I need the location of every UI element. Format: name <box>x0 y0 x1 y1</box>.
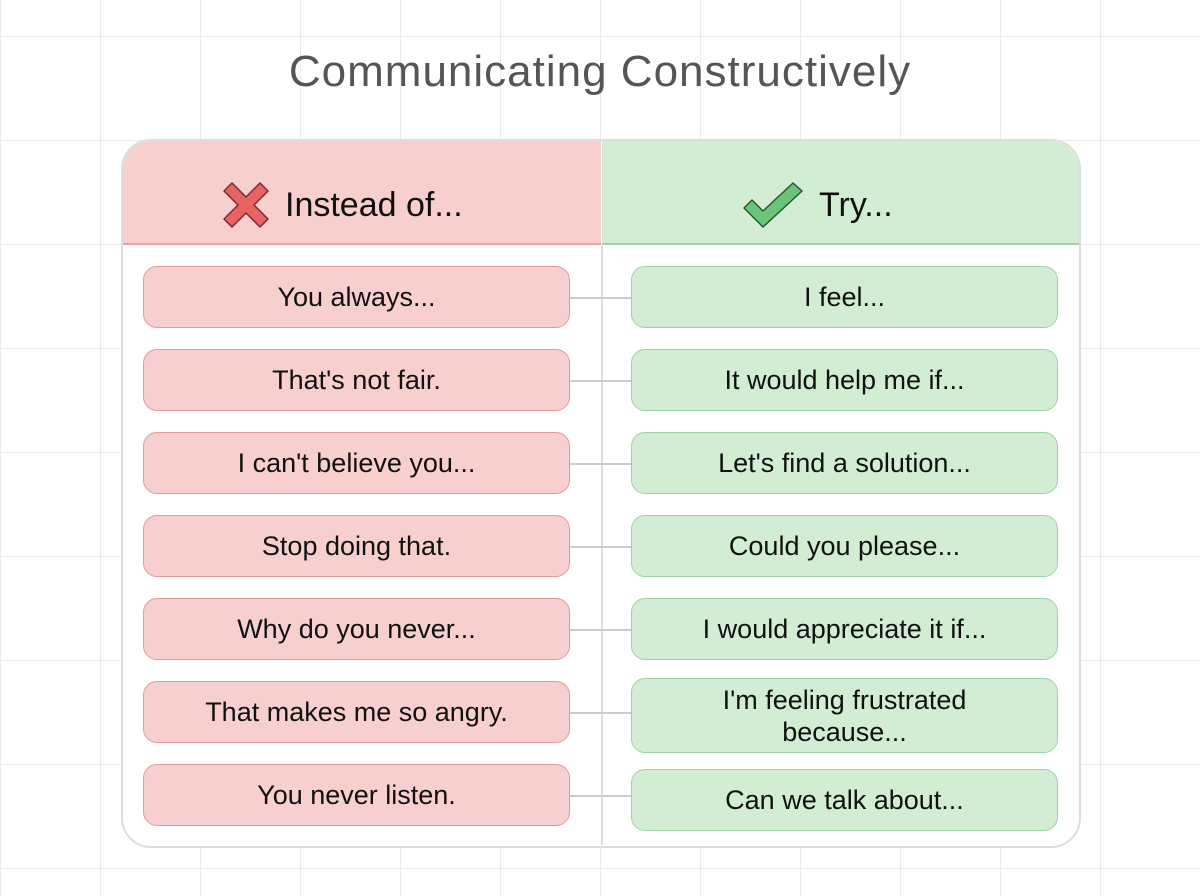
right pill 1 <box>631 266 1058 328</box>
right pill 3: Let's find a solution... <box>718 448 971 478</box>
right pill 5 <box>631 598 1058 660</box>
left pill 4 <box>143 515 570 577</box>
left pill 5: Why do you never... <box>237 614 476 644</box>
left pill 5 <box>143 598 570 660</box>
left pill 6 <box>143 681 570 743</box>
left pill 1: You always... <box>277 282 436 312</box>
panel: comparison table <box>121 139 1081 848</box>
right pill 6: because... <box>782 716 907 746</box>
right pill 2 <box>631 349 1058 411</box>
right pill 5: I would appreciate it if... <box>703 614 986 644</box>
left pill 3: I can't believe you... <box>238 448 475 478</box>
right pill 4: Could you please... <box>729 531 960 561</box>
right pill 3 <box>631 432 1058 494</box>
right pill 4 <box>631 515 1058 577</box>
left pill 3 <box>143 432 570 494</box>
icon: red cross with label: Instead of... <box>285 186 463 224</box>
header: instead of <box>123 141 601 245</box>
left pill 4: Stop doing that. <box>262 531 451 561</box>
left pill 2 <box>143 349 570 411</box>
left pill 6: That makes me so angry. <box>205 697 508 727</box>
right pill 7: Can we talk about... <box>725 785 964 815</box>
icon: green check with label: Try... <box>819 186 893 224</box>
right pill 6 <box>631 678 1058 753</box>
left pill 7 <box>143 764 570 826</box>
right pill 1: I feel... <box>804 282 885 312</box>
icon: green check with label <box>743 182 893 228</box>
header: try <box>602 141 1080 245</box>
right pill 2: It would help me if... <box>724 365 965 395</box>
left pill 2: That's not fair. <box>272 365 441 395</box>
left pill 1 <box>143 266 570 328</box>
title: Communicating Constructively <box>289 47 911 96</box>
icon: red cross with label <box>223 182 463 228</box>
right pill 7 <box>631 769 1058 831</box>
left pill 7: You never listen. <box>257 780 456 810</box>
right pill 6: I'm feeling frustrated <box>723 684 966 714</box>
